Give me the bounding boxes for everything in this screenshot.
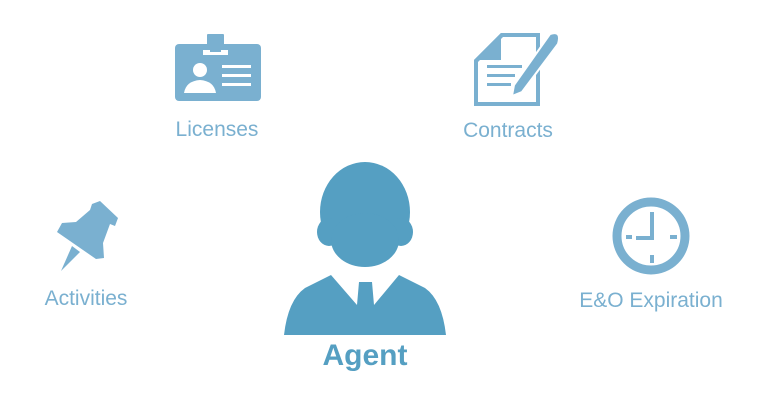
icon: clock <box>617 202 685 270</box>
label: Contracts: Contracts <box>463 119 553 142</box>
icon: agent <box>284 162 446 335</box>
icon: contract with pen <box>474 33 559 106</box>
label: Licenses: Licenses <box>176 118 258 141</box>
icon: license card <box>175 34 261 101</box>
label: Activities: Activities <box>45 287 127 310</box>
label: E&O Expiration: E&O Expiration <box>579 289 723 312</box>
label: Agent: Agent <box>322 339 408 372</box>
icon: pushpin <box>57 201 118 271</box>
